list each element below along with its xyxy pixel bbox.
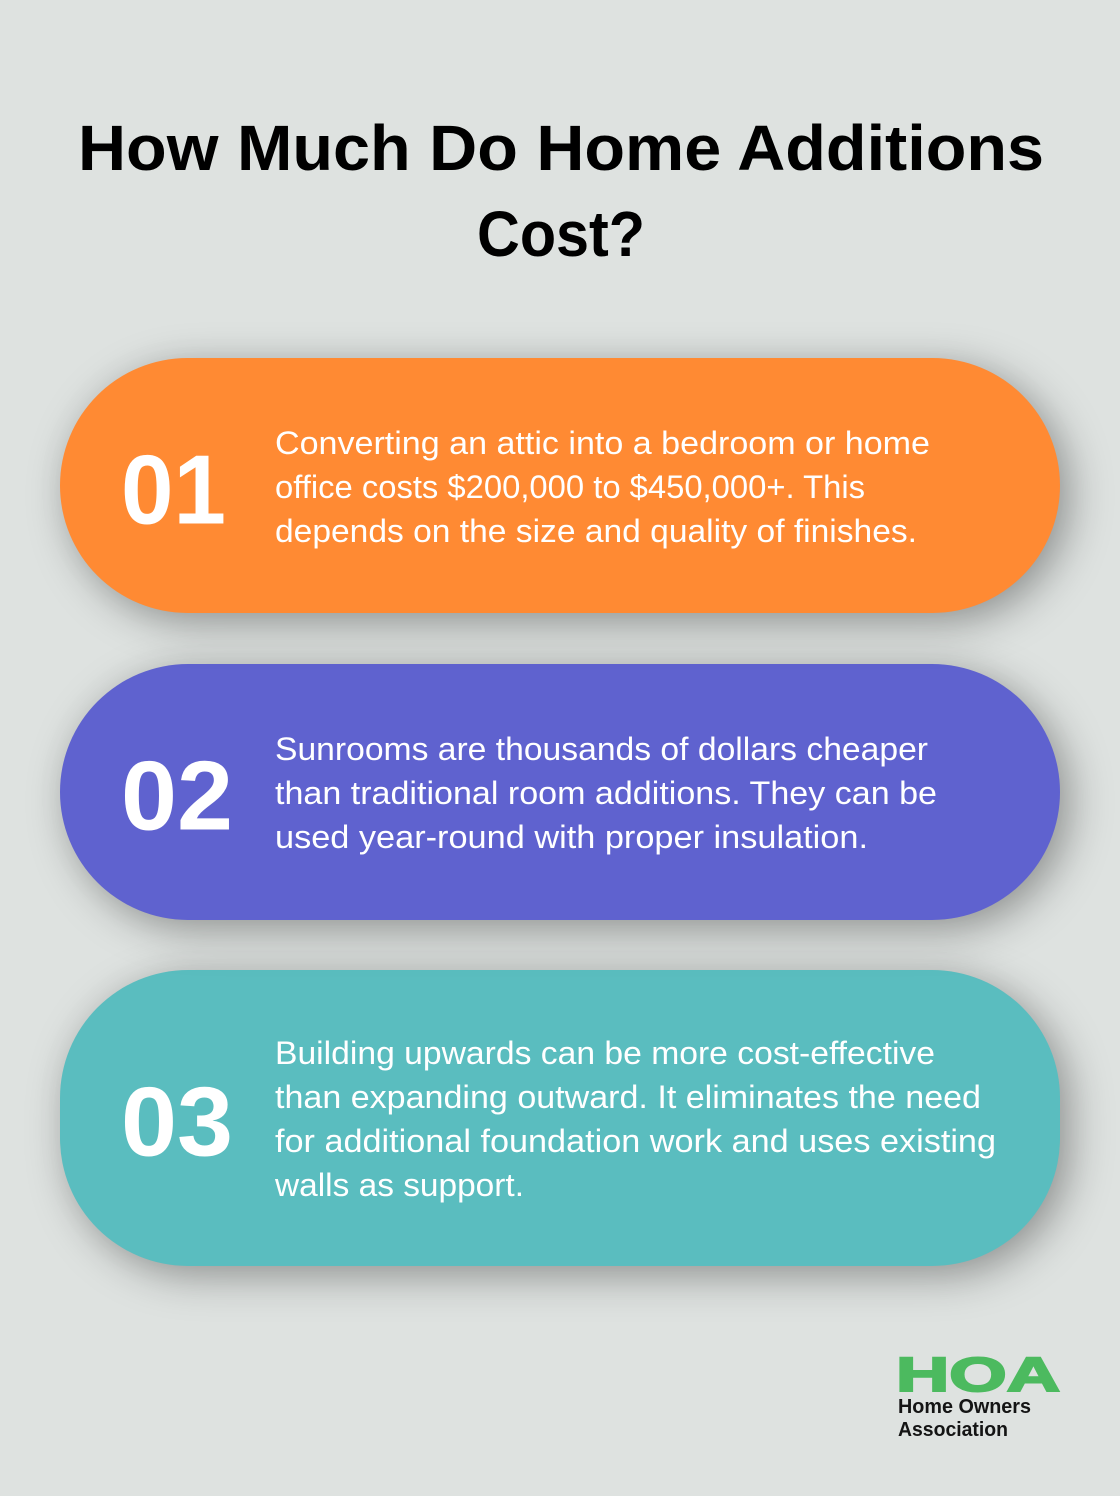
number 03: 03 (121, 1066, 233, 1176)
text block: building upwards: than expanding outward. It eliminates the need (275, 1079, 981, 1115)
text block: attic conversion cost (275, 425, 930, 549)
logo wordmark: Home Owners (898, 1396, 1031, 1418)
number 02: 02 (121, 740, 233, 850)
text block: sunroom savings: used year-round with proper insulation. (275, 819, 868, 855)
title: How Much Do Home Additions (78, 112, 1044, 184)
text block: sunroom savings: than traditional room additions. They can be (275, 775, 937, 811)
panel: card 02 sunrooms (60, 664, 1060, 920)
panel: card 01 attic conversion (60, 358, 1060, 613)
number 01: 01 (121, 434, 226, 544)
text block: building upwards: Building upwards can be more cost-effective (275, 1035, 935, 1071)
logo: HOA Home Owners Association (896, 1350, 1060, 1441)
panel: card 03 building upwards (60, 970, 1060, 1266)
title (78, 112, 1044, 270)
logo wordmark (898, 1396, 1031, 1441)
text block: attic conversion cost: Converting an attic into a bedroom or home (275, 425, 930, 461)
text block: attic conversion cost: office costs $200,000 to $450,000+. This (275, 469, 865, 505)
title: Cost? (477, 198, 645, 270)
text block: building upwards (274, 1035, 996, 1203)
text block: sunroom savings: Sunrooms are thousands of dollars cheaper (275, 731, 928, 767)
logo mark HOA: HOA (896, 1350, 1060, 1402)
text block: attic conversion cost: depends on the size and quality of finishes. (275, 513, 917, 549)
text block: building upwards: for additional foundation work and uses existing (275, 1123, 996, 1159)
text block: sunroom savings (275, 731, 937, 855)
text block: building upwards: walls as support. (274, 1167, 524, 1203)
logo wordmark: Association (898, 1419, 1008, 1441)
